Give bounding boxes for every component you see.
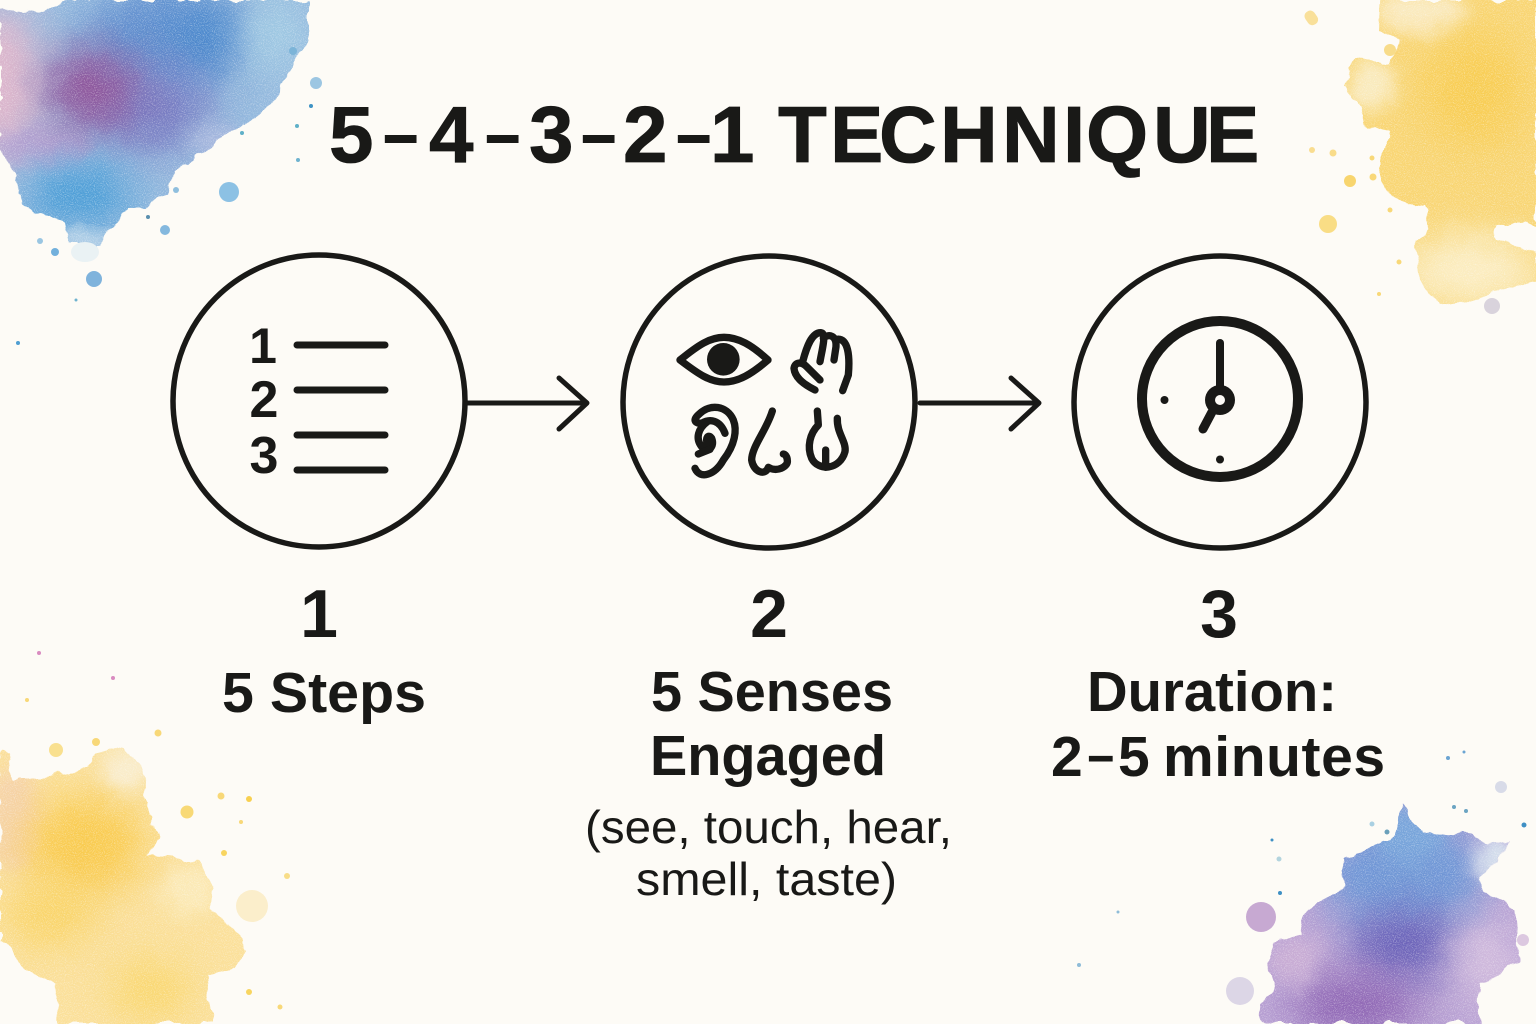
step 2 label: smell, taste) — [636, 853, 897, 905]
title: 1 — [710, 90, 777, 179]
step 2 label: 5 Senses — [651, 660, 893, 724]
step 1 label — [222, 576, 426, 725]
step 2 icon: five senses in a circle — [623, 256, 915, 548]
icon: tongue — [809, 411, 845, 467]
title: 5 — [329, 90, 374, 179]
title: – — [384, 101, 417, 168]
step 3 label: 3 — [1200, 576, 1238, 652]
step 2 label: Engaged — [650, 724, 886, 788]
step 3 label: – — [1088, 729, 1114, 781]
step 1 icon: numbered list in a circle: 3 — [250, 427, 278, 485]
step 1 icon: numbered list in a circle — [173, 255, 465, 547]
step 3 label: 5 — [1118, 725, 1166, 789]
icon: eye — [680, 337, 768, 382]
icon: hand — [794, 333, 849, 391]
watercolor splash: bottom left yellow — [0, 651, 290, 1024]
step 1 icon: numbered list in a circle: 1 — [249, 318, 277, 374]
step 2 label: 2 — [750, 576, 788, 652]
step 2 label: (see, touch, hear, — [585, 801, 952, 853]
watercolor splash: top right yellow — [1302, 0, 1536, 320]
title: 3 — [529, 90, 574, 179]
icon: nose — [752, 411, 787, 472]
step 3 label: 2 — [1051, 725, 1083, 789]
step 3 label: minutes — [1163, 725, 1386, 789]
watercolor splash: top left blue and purple — [0, 0, 322, 345]
title: 2 — [623, 90, 668, 179]
arrow: step 1 to step 2 — [467, 378, 587, 429]
step 3 label — [1051, 576, 1386, 789]
title: TECHNIQUE — [778, 90, 1259, 179]
step 1 label: 1 — [300, 576, 338, 652]
step 3 icon: clock in a circle — [1074, 256, 1366, 548]
step 1 icon: numbered list in a circle: 2 — [250, 371, 278, 429]
arrow: step 2 to step 3 — [920, 378, 1039, 429]
icon: ear — [695, 407, 735, 475]
title: – — [677, 101, 710, 168]
title: – — [582, 101, 615, 168]
watercolor splash: bottom right blue and purple — [1077, 750, 1536, 1024]
title: 4 — [429, 90, 474, 179]
title: – — [486, 101, 519, 168]
step 3 label: Duration: — [1087, 660, 1337, 724]
step 2 label — [585, 576, 952, 905]
step 1 label: 5 Steps — [222, 661, 426, 725]
